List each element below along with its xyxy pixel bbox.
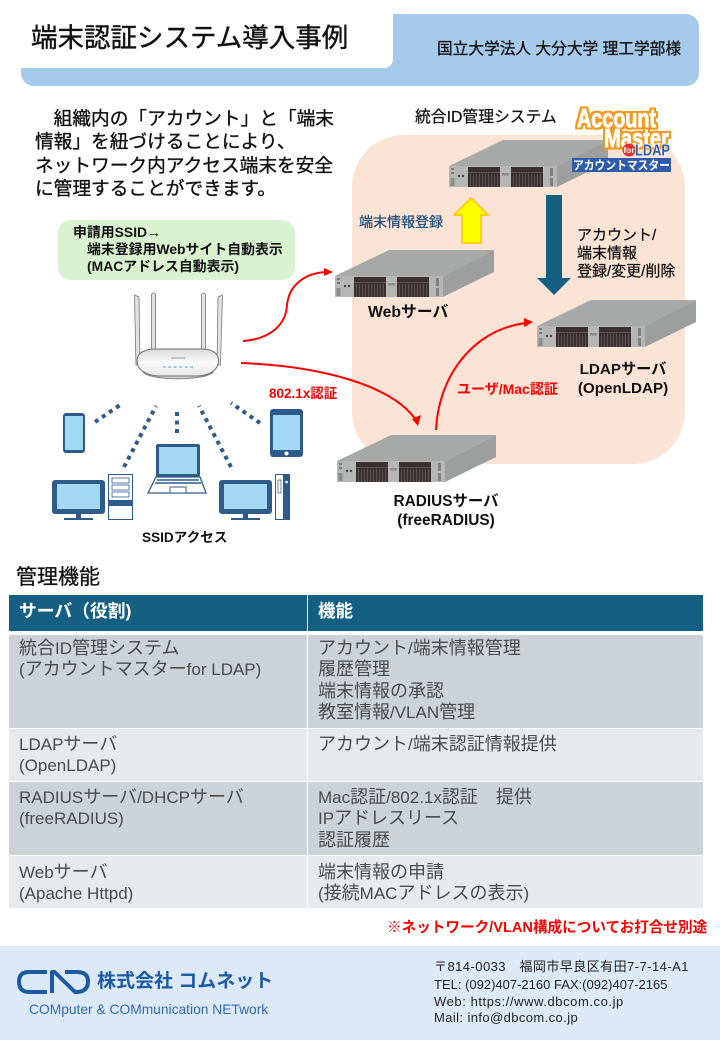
- company contact: [434, 959, 689, 1025]
- server: web: [335, 250, 494, 297]
- label: SSID access: SSIDアクセス: [142, 530, 227, 545]
- icon: laptop: [148, 444, 206, 493]
- company contact: TEL: (092)407-2160 FAX:(092)407-2165: [434, 977, 667, 992]
- table row: RADIUS: IPアドレスリース: [318, 808, 459, 828]
- table header: [9, 595, 703, 631]
- company contact: Web: https://www.dbcom.co.jp: [434, 994, 624, 1009]
- logo: Account Master for LDAP: LDAP: [635, 142, 670, 160]
- server: RADIUS: [337, 435, 496, 482]
- table row: integrated ID: [9, 635, 703, 728]
- label: web server: Webサーバ: [368, 304, 448, 321]
- table row: RADIUS: [9, 782, 703, 855]
- table row: web: (Apache Httpd): [19, 884, 133, 903]
- table row: LDAP: LDAPサーバ: [19, 734, 117, 754]
- panel: server zone: [352, 135, 685, 464]
- table row: RADIUS: 認証履歴: [318, 830, 390, 850]
- header cell: function: 機能: [318, 601, 353, 621]
- callout text: SSID note: 端末登録用Webサイト自動表示: [87, 241, 283, 257]
- label: integrated ID system: 統合ID管理システム: [415, 109, 557, 126]
- intro text: ネットワーク内アクセス端末を安全: [35, 155, 333, 176]
- label: account sync: 登録/変更/削除: [577, 263, 675, 280]
- arrow: blue account sync arrow: [537, 195, 571, 295]
- label: LDAP server: [578, 361, 668, 397]
- header cell: server role: サーバ（役割): [19, 601, 131, 621]
- table row: LDAP: アカウント/端末認証情報提供: [318, 734, 557, 754]
- intro text: に管理することができます。: [35, 178, 276, 199]
- wireless signal dotted lines: [95, 403, 260, 467]
- heading: management functions: 管理機能: [16, 566, 100, 589]
- table row: integrated ID: 教室情報/VLAN管理: [318, 702, 475, 722]
- icon: desktop computer right: [219, 474, 290, 520]
- label: RADIUS server: RADIUSサーバ: [393, 493, 499, 510]
- intro text: [35, 108, 334, 199]
- icon: smartphone: [63, 413, 85, 453]
- footer band: [0, 946, 720, 1040]
- callout text: SSID note: (MACアドレス自動表示): [87, 258, 239, 274]
- label: RADIUS server: (freeRADIUS): [397, 512, 495, 529]
- intro text: 組織内の「アカウント」と「端末: [54, 108, 334, 129]
- label: account sync: 端末情報: [577, 245, 637, 262]
- table row: web: 端末情報の申請: [318, 862, 444, 882]
- table row: integrated ID: アカウント/端末情報管理: [318, 638, 521, 658]
- label: account sync: アカウント/: [577, 227, 656, 244]
- server: integrated ID management: [449, 140, 608, 187]
- icon: desktop computer left: [52, 474, 132, 520]
- company name: 株式会社 コムネット: [97, 971, 273, 992]
- logo: Account Master for LDAP: for: [623, 145, 635, 155]
- label: 802.1x auth: 802.1x認証: [269, 386, 337, 401]
- logo: Account Master for LDAP: Master: [604, 123, 669, 153]
- table row: web: [9, 856, 703, 908]
- icon: tablet: [270, 409, 303, 457]
- table row: integrated ID: 統合ID管理システム: [19, 638, 179, 658]
- table row: web: Webサーバ: [19, 862, 107, 882]
- footnote: ※ネットワーク/VLAN構成についてお打合せ別途: [387, 920, 707, 936]
- logo: Account Master for LDAP: Account: [577, 103, 656, 133]
- client name: 国立大学法人 大分大学 理工学部様: [437, 41, 681, 58]
- intro text: 情報」を紐づけることにより、: [35, 131, 296, 152]
- label: LDAP server: (OpenLDAP): [578, 380, 668, 397]
- label: account sync: [577, 227, 676, 280]
- table row: web: (接続MACアドレスの表示): [318, 883, 529, 903]
- arrow: RADIUS to LDAP server: [436, 318, 533, 430]
- server: LDAP: [537, 300, 696, 347]
- company contact: Mail: info@dbcom.co.jp: [434, 1010, 578, 1025]
- callout: SSID note: [58, 220, 295, 280]
- company tagline: COMputer & COMmunication NETwork: [29, 1002, 268, 1017]
- table row: LDAP: (OpenLDAP): [19, 756, 116, 775]
- logo: Account Master for LDAP: [572, 103, 671, 172]
- table row: RADIUS: RADIUSサーバ/DHCPサーバ: [19, 786, 244, 806]
- arrow: router to RADIUS server: [241, 363, 421, 426]
- table row: RADIUS: (freeRADIUS): [19, 809, 124, 828]
- table row: integrated ID: 履歴管理: [318, 659, 390, 679]
- callout text: SSID note: [73, 224, 283, 274]
- table row: RADIUS: Mac認証/802.1x認証 提供: [318, 786, 532, 806]
- callout text: SSID note: 申請用SSID→: [73, 224, 161, 240]
- logo: Account Master for LDAP: アカウントマスター: [573, 158, 670, 172]
- label: device info registration: 端末情報登録: [359, 214, 443, 230]
- title: 端末認証システム導入事例: [31, 23, 348, 53]
- table row: integrated ID: 端末情報の承認: [318, 680, 444, 700]
- label: LDAP server: LDAPサーバ: [580, 361, 666, 378]
- table row: LDAP: [9, 729, 703, 781]
- arrow: yellow registration arrow: [454, 198, 488, 243]
- icon: router: [134, 293, 222, 379]
- company contact: 〒814-0033 福岡市早良区有田7-7-14-A1: [434, 959, 689, 974]
- table: management functions: [9, 595, 703, 908]
- label: user/mac auth: ユーザ/Mac認証: [457, 381, 558, 397]
- title tab: [0, 0, 393, 68]
- header band: [21, 14, 699, 86]
- label: RADIUS server: [393, 493, 499, 529]
- arrow: router to web server: [243, 268, 333, 341]
- table row: integrated ID: (アカウントマスターfor LDAP): [19, 659, 261, 679]
